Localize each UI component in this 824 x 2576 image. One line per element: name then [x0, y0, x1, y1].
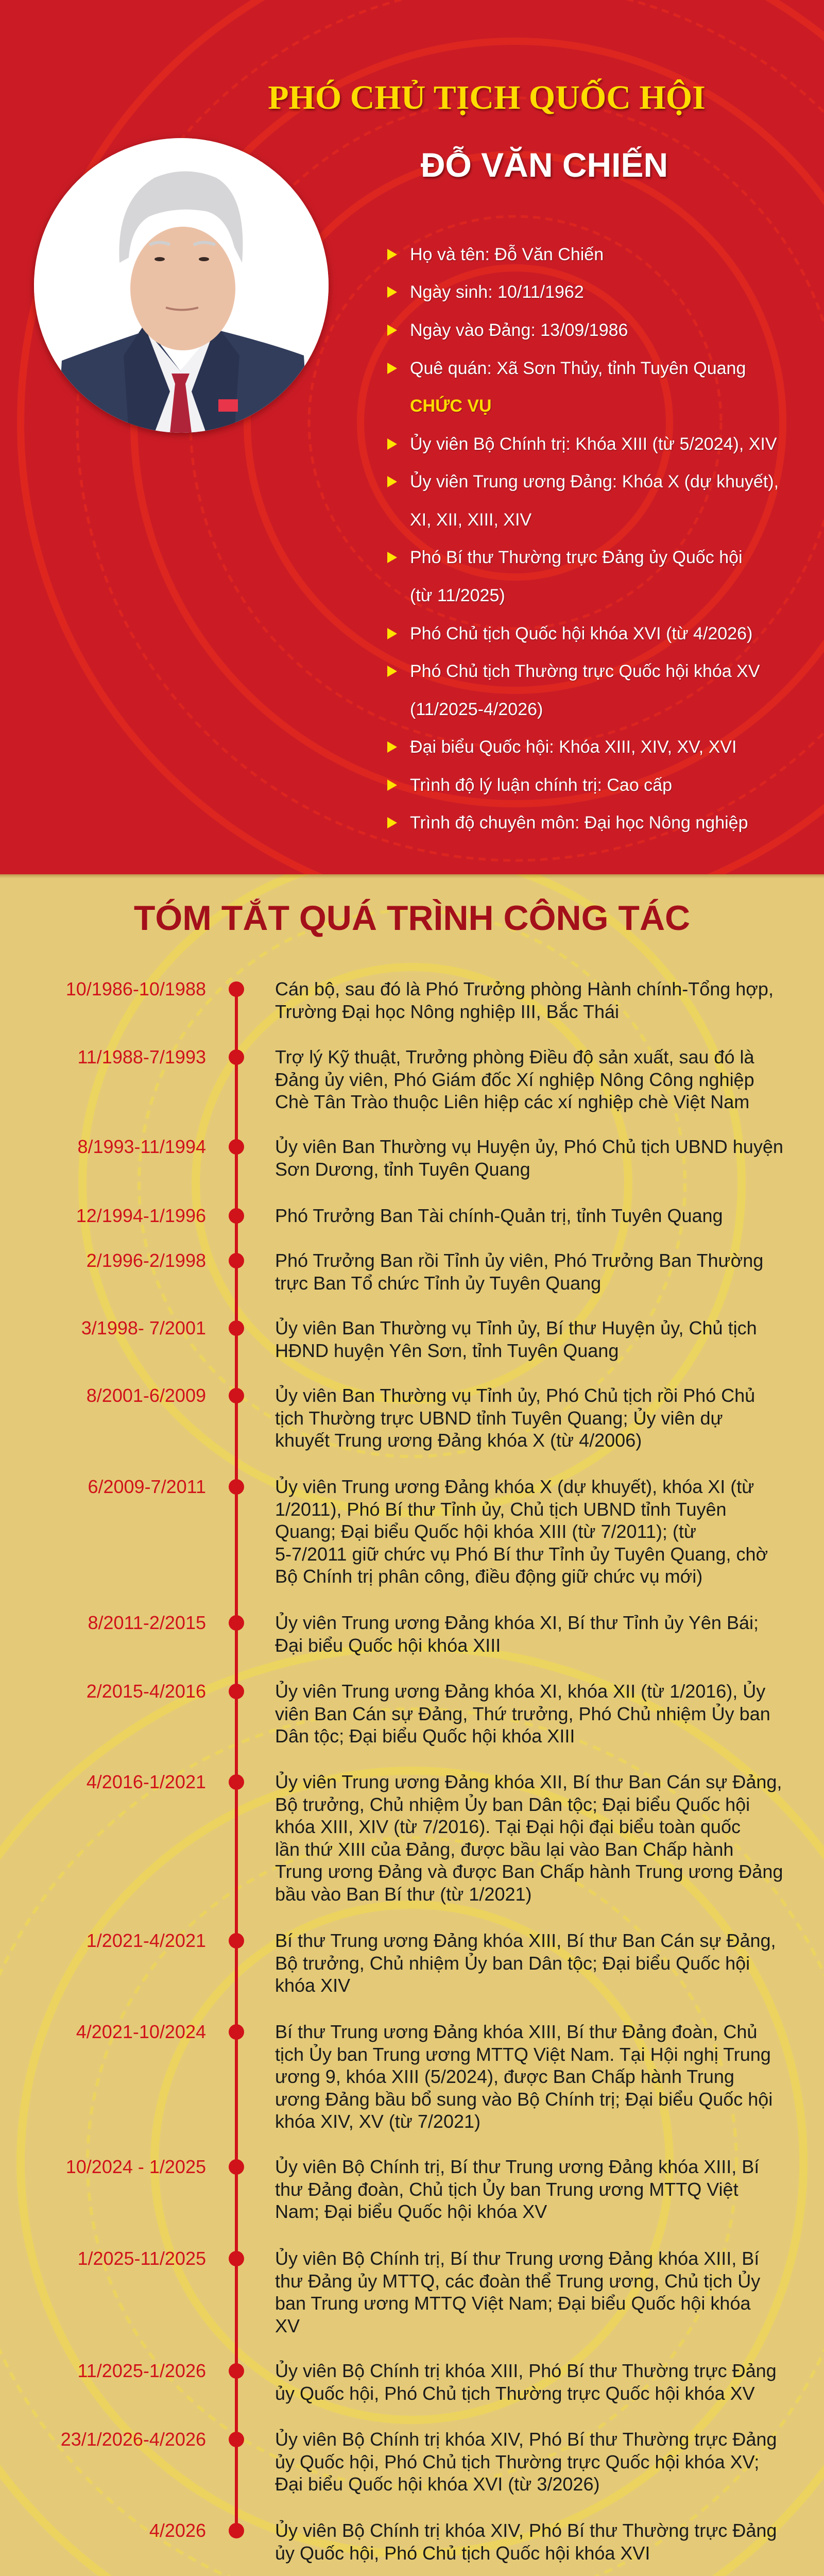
photo: portrait	[34, 138, 329, 433]
timeline entries: Ủy viên Bộ Chính trị khóa XIV, Phó Bí thư Thường trực Đảng	[275, 2429, 777, 2450]
timeline entries: tịch Thường trực UBND tỉnh Tuyên Quang; Ủy viên dự	[275, 1408, 723, 1429]
timeline entries: Cán bộ, sau đó là Phó Trưởng phòng Hành chính-Tổng hợp,	[275, 978, 774, 999]
timeline entries: 8/2001-6/2009	[87, 1385, 206, 1406]
timeline entries: 1/2025-11/2025	[77, 2248, 206, 2269]
heading: timeline title: TÓM TẮT QUÁ TRÌNH CÔNG TÁC	[134, 899, 690, 938]
timeline entries: Nam; Đại biểu Quốc hội khóa XV	[275, 2201, 547, 2222]
bullet list: personal info: Ủy viên Bộ Chính trị: Khóa XIII (từ 5/2024), XIV	[410, 434, 777, 454]
timeline entries: trực Ban Tổ chức Tỉnh ủy Tuyên Quang	[275, 1273, 601, 1294]
timeline entries: ủy Quốc hội, Phó Chủ tịch Quốc hội khóa XVI	[275, 2543, 650, 2564]
timeline entries: khuyết Trung ương Đảng khóa X (từ 4/2006)	[275, 1430, 642, 1451]
timeline entries: Ủy viên Bộ Chính trị, Bí thư Trung ương Đảng khóa XIII, Bí	[275, 2156, 759, 2177]
timeline entries: Ủy viên Bộ Chính trị, Bí thư Trung ương Đảng khóa XIII, Bí	[275, 2248, 759, 2269]
bullet list: personal info: Ngày sinh: 10/11/1962	[410, 282, 584, 302]
timeline entries: 11/2025-1/2026	[77, 2360, 206, 2381]
timeline entries: ương 9, khóa XIII (5/2024), được Ban Chấp hành Trung	[275, 2066, 734, 2087]
timeline entries: 4/2026	[149, 2520, 206, 2541]
timeline entries: 8/1993-11/1994	[77, 1136, 206, 1157]
bullet list: personal info: Trình độ lý luận chính trị: Cao cấp	[410, 775, 672, 795]
timeline entries: HĐND huyện Yên Sơn, tỉnh Tuyên Quang	[275, 1340, 619, 1361]
timeline entries: Bộ Chính trị phân công, điều động giữ chức vụ mới)	[275, 1566, 702, 1587]
timeline entries: Quang; Đại biểu Quốc hội khóa XIII (từ 7/2011); (từ	[275, 1521, 696, 1542]
timeline entries: Ủy viên Bộ Chính trị khóa XIV, Phó Bí thư Thường trực Đảng	[275, 2520, 777, 2541]
timeline entries: 4/2016-1/2021	[87, 1771, 206, 1792]
timeline entries: 2/2015-4/2016	[87, 1681, 206, 1702]
timeline entries: 11/1988-7/1993	[77, 1046, 206, 1067]
timeline entries: Trợ lý Kỹ thuật, Trưởng phòng Điều độ sản xuất, sau đó là	[275, 1046, 754, 1067]
bullet list: personal info: Phó Bí thư Thường trực Đảng ủy Quốc hội	[410, 548, 743, 567]
timeline entries: Bí thư Trung ương Đảng khóa XIII, Bí thư Ban Cán sự Đảng,	[275, 1930, 776, 1951]
bullet list: personal info: (11/2025-4/2026)	[410, 700, 543, 719]
timeline entries: ủy Quốc hội, Phó Chủ tịch Thường trực Quốc hội khóa XV	[275, 2383, 755, 2404]
timeline entries: Ủy viên Trung ương Đảng khóa XI, khóa XII (từ 1/2016), Ủy	[275, 1681, 765, 1702]
timeline entries: khóa XIV, XV (từ 7/2021)	[275, 2111, 480, 2132]
timeline entries: 8/2011-2/2015	[88, 1612, 206, 1633]
bullet list: personal info: Ủy viên Trung ương Đảng: Khóa X (dự khuyết),	[410, 472, 779, 492]
timeline entries: viên Ban Cán sự Đảng, Thứ trưởng, Phó Chủ nhiệm Ủy ban	[275, 1703, 770, 1724]
timeline entries: ban Trung ương MTTQ Việt Nam; Đại biểu Quốc hội khóa	[275, 2293, 750, 2314]
bullet list: personal info: Quê quán: Xã Sơn Thủy, tỉnh Tuyên Quang	[410, 359, 746, 378]
timeline entries: Đại biểu Quốc hội khóa XVI (từ 3/2026)	[275, 2473, 599, 2495]
timeline entries: 1/2011), Phó Bí thư Tỉnh ủy, Chủ tịch UBND tỉnh Tuyên	[275, 1499, 727, 1520]
timeline entries: Chè Tân Trào thuộc Liên hiệp các xí nghiệp chè Việt Nam	[275, 1091, 749, 1112]
bullet list: personal info: XI, XII, XIII, XIV	[410, 510, 531, 530]
timeline entries: 3/1998- 7/2001	[81, 1317, 206, 1338]
timeline entries: 1/2021-4/2021	[87, 1930, 206, 1951]
timeline entries: 2/1996-2/1998	[87, 1250, 206, 1271]
timeline: vertical line	[235, 989, 238, 2531]
timeline entries: 10/2024 - 1/2025	[66, 2156, 206, 2177]
timeline entries: Bộ trưởng, Chủ nhiệm Ủy ban Dân tộc; Đại biểu Quốc hội	[275, 1953, 750, 1974]
timeline entries: ương Đảng bầu bổ sung vào Bộ Chính trị; Đại biểu Quốc hội	[275, 2089, 772, 2110]
timeline entries: thư Đảng ủy MTTQ, các đoàn thể Trung ương, Chủ tịch Ủy	[275, 2270, 760, 2292]
bullet list: personal info: Đại biểu Quốc hội: Khóa XIII, XIV, XV, XVI	[410, 737, 736, 757]
bullet list: personal info: Phó Chủ tịch Quốc hội khóa XVI (từ 4/2026)	[410, 624, 752, 643]
bullet list: personal info: CHỨC VỤ	[410, 396, 492, 416]
timeline entries: khóa XIII, XIV (từ 7/2016). Tại Đại hội đại biểu toàn quốc	[275, 1816, 741, 1837]
name: ĐỖ VĂN CHIẾN	[421, 146, 668, 184]
panel: career timeline	[0, 874, 824, 2576]
timeline entries: Ủy viên Ban Thường vụ Tỉnh ủy, Bí thư Huyện ủy, Chủ tịch	[275, 1317, 757, 1338]
timeline entries: Bí thư Trung ương Đảng khóa XIII, Bí thư Đảng đoàn, Chủ	[275, 2021, 757, 2042]
timeline entries: Bộ trưởng, Chủ nhiệm Ủy ban Dân tộc; Đại biểu Quốc hội	[275, 1794, 750, 1815]
timeline entries: lần thứ XIII của Đảng, được bầu lại vào Ban Chấp hành	[275, 1839, 733, 1860]
timeline entries	[61, 978, 783, 2564]
timeline entries: Ủy viên Trung ương Đảng khóa XII, Bí thư Ban Cán sự Đảng,	[275, 1771, 782, 1792]
timeline entries: Đại biểu Quốc hội khóa XIII	[275, 1635, 501, 1656]
timeline entries: 6/2009-7/2011	[88, 1476, 206, 1497]
panel: header	[0, 0, 824, 874]
timeline entries: Dân tộc; Đại biểu Quốc hội khóa XIII	[275, 1725, 575, 1747]
timeline entries: Trường Đại học Nông nghiệp III, Bắc Thái	[275, 1001, 619, 1022]
bullet list: personal info	[387, 245, 779, 833]
timeline entries: Trung ương Đảng và được Ban Chấp hành Trung ương Đảng	[275, 1861, 783, 1882]
timeline entries: 10/1986-10/1988	[66, 978, 206, 999]
timeline entries: Phó Trưởng Ban Tài chính-Quản trị, tỉnh Tuyên Quang	[275, 1205, 723, 1226]
timeline entries: Ủy viên Trung ương Đảng khóa XI, Bí thư Tỉnh ủy Yên Bái;	[275, 1612, 759, 1633]
timeline entries: 5-7/2011 giữ chức vụ Phó Bí thư Tỉnh ủy Tuyên Quang, chờ	[275, 1544, 768, 1565]
timeline entries: XV	[275, 2315, 300, 2336]
timeline entries: Ủy viên Bộ Chính trị khóa XIII, Phó Bí thư Thường trực Đảng	[275, 2360, 777, 2381]
title: PHÓ CHỦ TỊCH QUỐC HỘI	[268, 79, 706, 116]
bullet list: personal info: Họ và tên: Đỗ Văn Chiến	[410, 245, 604, 264]
timeline entries: Ủy viên Ban Thường vụ Huyện ủy, Phó Chủ tịch UBND huyện	[275, 1136, 783, 1157]
timeline entries: 23/1/2026-4/2026	[61, 2429, 206, 2450]
timeline entries: 4/2021-10/2024	[76, 2021, 206, 2042]
timeline entries: khóa XIV	[275, 1975, 350, 1996]
timeline entries: tịch Ủy ban Trung ương MTTQ Việt Nam. Tại Hội nghị Trung	[275, 2044, 771, 2065]
bullet list: personal info: (từ 11/2025)	[410, 586, 505, 605]
bullet list: personal info: Phó Chủ tịch Thường trực Quốc hội khóa XV	[410, 662, 760, 681]
timeline entries: Ủy viên Ban Thường vụ Tỉnh ủy, Phó Chủ tịch rồi Phó Chủ	[275, 1385, 755, 1406]
timeline entries: 12/1994-1/1996	[76, 1205, 206, 1226]
timeline entries: thư Đảng đoàn, Chủ tịch Ủy ban Trung ương MTTQ Việt	[275, 2179, 739, 2200]
timeline entries: Phó Trưởng Ban rồi Tỉnh ủy viên, Phó Trưởng Ban Thường	[275, 1250, 763, 1271]
timeline entries: Đảng ủy viên, Phó Giám đốc Xí nghiệp Nông Công nghiệp	[275, 1069, 754, 1090]
timeline entries: Sơn Dương, tỉnh Tuyên Quang	[275, 1159, 530, 1180]
timeline entries: bầu vào Ban Bí thư (từ 1/2021)	[275, 1884, 531, 1905]
timeline entries: ủy Quốc hội, Phó Chủ tịch Thường trực Quốc hội khóa XV;	[275, 2451, 759, 2472]
timeline entries: Ủy viên Trung ương Đảng khóa X (dự khuyết), khóa XI (từ	[275, 1476, 754, 1497]
bullet list: personal info: Ngày vào Đảng: 13/09/1986	[410, 320, 628, 340]
bullet list: personal info: Trình độ chuyên môn: Đại học Nông nghiệp	[410, 813, 748, 833]
